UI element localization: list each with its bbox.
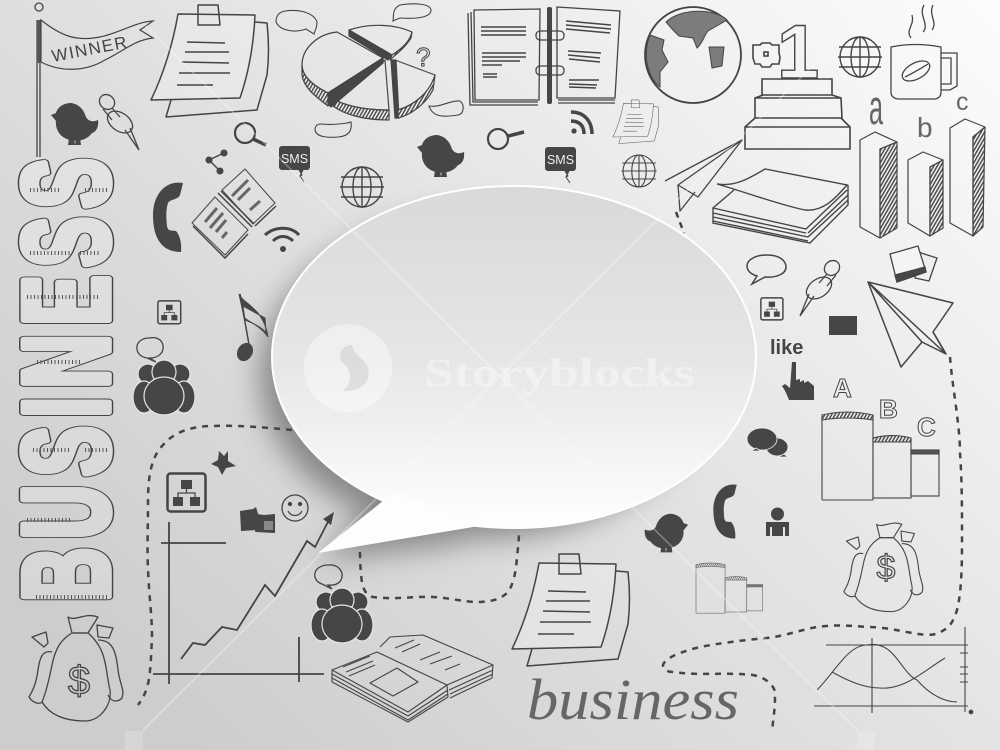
business outline word: BUSINESS (0, 158, 134, 602)
coffee mug (891, 5, 957, 99)
letters abc outline: A (833, 373, 852, 403)
magnifier centre (488, 129, 524, 149)
globe icon mid (621, 155, 657, 187)
hand pointer icon (782, 362, 814, 400)
number one on podium (745, 10, 850, 149)
watermark logo (304, 324, 392, 412)
dashed route right (663, 357, 962, 732)
people group with bubble left (133, 338, 195, 415)
money bag right (844, 523, 923, 612)
bar letters: b (917, 112, 933, 143)
phone bottom (713, 484, 737, 539)
bar letters: a (869, 81, 883, 135)
speech bubble outlines near pie (276, 4, 463, 137)
question mark: ? (416, 42, 430, 72)
person icon (766, 508, 789, 536)
like label: like (770, 337, 803, 359)
sms label right: SMS (547, 153, 574, 167)
paper plane large (868, 282, 953, 367)
dashed stub below plane (676, 212, 684, 233)
handwritten business: business (527, 667, 739, 732)
watermark diagonal lines (125, 22, 875, 750)
winner flag (35, 3, 153, 157)
money bag left (29, 616, 123, 721)
bird top centre (417, 135, 464, 177)
small cylinder chart (696, 563, 763, 613)
business outline word: BUSINESS (0, 158, 134, 602)
flag label: WINNER (50, 33, 128, 66)
folder stack (713, 169, 848, 243)
push pin left (96, 91, 139, 150)
sticky note top (151, 5, 268, 117)
sticky note bottom (512, 554, 630, 666)
phone left (153, 183, 183, 252)
dashed route left (138, 426, 292, 705)
sticky note small (613, 100, 659, 144)
ring binder notebook (468, 7, 620, 105)
people group with bubble centre (311, 565, 373, 643)
dollar sign: $ (68, 659, 90, 703)
speech bubble (272, 186, 756, 553)
number one: 1 (777, 10, 819, 95)
magnifier left (235, 123, 266, 145)
speech bubble shadow (260, 214, 704, 560)
letters abc outline (833, 373, 936, 442)
wave chart (814, 627, 973, 714)
watermark text: Storyblocks (424, 350, 695, 395)
org icon left small (158, 301, 181, 324)
push pin right (800, 257, 843, 316)
share icon (206, 150, 227, 174)
letters abc outline: B (879, 394, 898, 424)
bird top left (51, 103, 98, 145)
org icon right small (761, 298, 783, 320)
letters abc outline: C (917, 412, 936, 442)
dashed route centre (360, 532, 519, 602)
letter hatching (27, 190, 108, 597)
bar letters (869, 81, 968, 143)
speech outline right (747, 255, 786, 284)
open book (332, 635, 493, 722)
sms label: SMS (281, 152, 308, 166)
sms icon right (545, 147, 576, 183)
growth line chart (153, 512, 334, 684)
folder icons (240, 507, 275, 533)
music note (234, 294, 268, 363)
3d bar chart abc (860, 119, 985, 238)
chat icon (747, 428, 788, 457)
wifi icon (265, 228, 299, 252)
cylinder chart large (822, 412, 939, 500)
paper plane small (665, 140, 742, 211)
smiley (282, 495, 308, 521)
photo prints (890, 246, 937, 282)
open notebook tilted (192, 169, 276, 258)
organization icon lower left (168, 474, 206, 512)
bar letters: c (956, 88, 968, 116)
dollar sign right: $ (877, 549, 896, 587)
sms icon left (279, 146, 310, 182)
globe icon left (340, 167, 384, 207)
pie chart doodle (302, 25, 435, 120)
globe icon top right (838, 37, 882, 77)
star (211, 451, 236, 475)
earth globe (645, 7, 741, 103)
black rectangle (829, 316, 857, 335)
bubble tail (318, 492, 476, 553)
rss icon (571, 112, 592, 134)
bird bottom (645, 514, 688, 552)
